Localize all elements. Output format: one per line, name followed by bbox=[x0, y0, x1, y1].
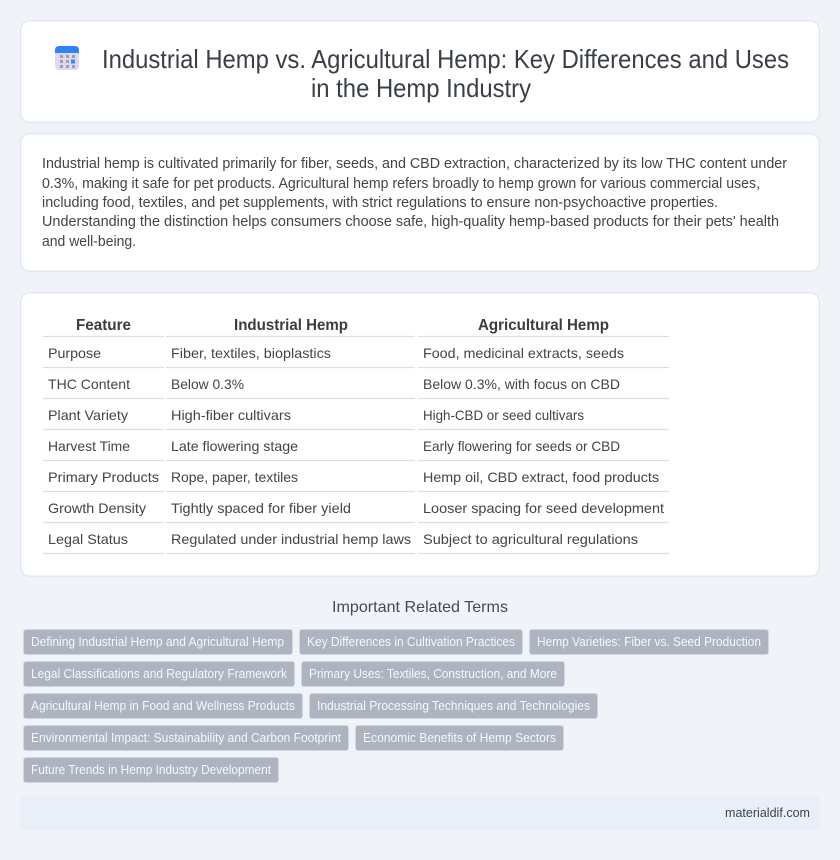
row: growth density: Looser spacing for seed development bbox=[423, 500, 664, 516]
text block: intro paragraph: 0.3%, making it safe for pet products. Agricultural hemp refers broadly to hemp grown for various commercial uses, bbox=[42, 176, 760, 192]
icon: calendar bbox=[55, 46, 79, 70]
row: THC content: THC Content bbox=[48, 376, 130, 392]
row: purpose: Purpose bbox=[48, 345, 101, 361]
table rules bbox=[43, 336, 669, 554]
tag: Key Differences in Cultivation Practices bbox=[307, 635, 515, 649]
text block: intro paragraph: and well-being. bbox=[42, 234, 136, 250]
tag: Defining Industrial Hemp and Agricultural Hemp bbox=[31, 635, 284, 649]
table header: Agricultural Hemp bbox=[478, 317, 609, 334]
row: purpose bbox=[48, 345, 624, 361]
tag: Hemp Varieties: Fiber vs. Seed Production bbox=[537, 635, 761, 649]
tag: Industrial Processing Techniques and Technologies bbox=[317, 699, 590, 713]
text block: intro paragraph: Industrial hemp is cultivated primarily for fiber, seeds, and CBD extraction, characterized by its low THC content under bbox=[42, 156, 787, 172]
tag bbox=[302, 662, 564, 686]
tag bbox=[300, 630, 522, 654]
panel: introduction text bbox=[21, 134, 819, 271]
row: plant variety bbox=[48, 407, 584, 423]
tag: Environmental Impact: Sustainability and Carbon Footprint bbox=[31, 731, 341, 745]
tag bbox=[310, 694, 598, 718]
row: primary products: Hemp oil, CBD extract, food products bbox=[423, 469, 659, 485]
footer bbox=[20, 796, 820, 830]
row: plant variety: High-CBD or seed cultivars bbox=[423, 407, 584, 423]
tag: Future Trends in Hemp Industry Development bbox=[31, 763, 271, 777]
text block: intro paragraph bbox=[42, 156, 787, 250]
row: THC content bbox=[48, 376, 620, 392]
tag bbox=[24, 758, 278, 782]
title: Industrial Hemp vs. Agricultural Hemp: Key Differences and Uses bbox=[102, 44, 789, 74]
row: primary products: Rope, paper, textiles bbox=[171, 469, 298, 485]
row: growth density: Growth Density bbox=[48, 500, 146, 516]
row: legal status: Regulated under industrial hemp laws bbox=[171, 531, 411, 547]
table header: Industrial Hemp bbox=[234, 317, 348, 334]
row: legal status: Subject to agricultural regulations bbox=[423, 531, 638, 547]
tag bbox=[24, 662, 294, 686]
row: harvest time bbox=[48, 438, 620, 454]
tag bbox=[24, 726, 348, 750]
row: plant variety: High-fiber cultivars bbox=[171, 407, 291, 423]
row: primary products bbox=[48, 469, 659, 485]
row: legal status bbox=[48, 531, 638, 547]
text block: intro paragraph: including food, textiles, and pet supplements, with strict regulations to ensure non-psychoactive properties. bbox=[42, 195, 718, 211]
table header: Feature bbox=[76, 317, 131, 334]
tag bbox=[24, 694, 302, 718]
row: THC content: Below 0.3% bbox=[171, 376, 244, 392]
row: harvest time: Late flowering stage bbox=[171, 438, 298, 454]
row: purpose: Food, medicinal extracts, seeds bbox=[423, 345, 624, 361]
tag bbox=[530, 630, 768, 654]
tag: Primary Uses: Textiles, Construction, and More bbox=[309, 667, 557, 681]
tag bbox=[24, 630, 292, 654]
text block: intro paragraph: Understanding the distinction helps consumers choose safe, high-quality hemp-based products for their pets' health bbox=[42, 214, 779, 230]
tag: Legal Classifications and Regulatory Framework bbox=[31, 667, 288, 681]
tag bbox=[356, 726, 564, 750]
row: primary products: Primary Products bbox=[48, 469, 159, 485]
related terms tags bbox=[24, 630, 768, 782]
row: harvest time: Early flowering for seeds or CBD bbox=[423, 438, 620, 454]
tag: Economic Benefits of Hemp Sectors bbox=[363, 731, 556, 745]
table header bbox=[76, 317, 609, 334]
row: harvest time: Harvest Time bbox=[48, 438, 130, 454]
row: growth density bbox=[48, 500, 664, 516]
row: legal status: Legal Status bbox=[48, 531, 128, 547]
panel: header bbox=[21, 21, 819, 122]
row: THC content: Below 0.3%, with focus on CBD bbox=[423, 376, 620, 392]
row: purpose: Fiber, textiles, bioplastics bbox=[171, 345, 331, 361]
tag: Agricultural Hemp in Food and Wellness Products bbox=[31, 699, 295, 713]
footer: materialdif.com bbox=[725, 806, 810, 820]
title bbox=[102, 44, 789, 103]
heading: important related terms: Important Related Terms bbox=[332, 599, 508, 616]
row: growth density: Tightly spaced for fiber yield bbox=[171, 500, 351, 516]
row: plant variety: Plant Variety bbox=[48, 407, 128, 423]
title: in the Hemp Industry bbox=[311, 73, 531, 103]
panel: comparison table bbox=[21, 293, 819, 576]
